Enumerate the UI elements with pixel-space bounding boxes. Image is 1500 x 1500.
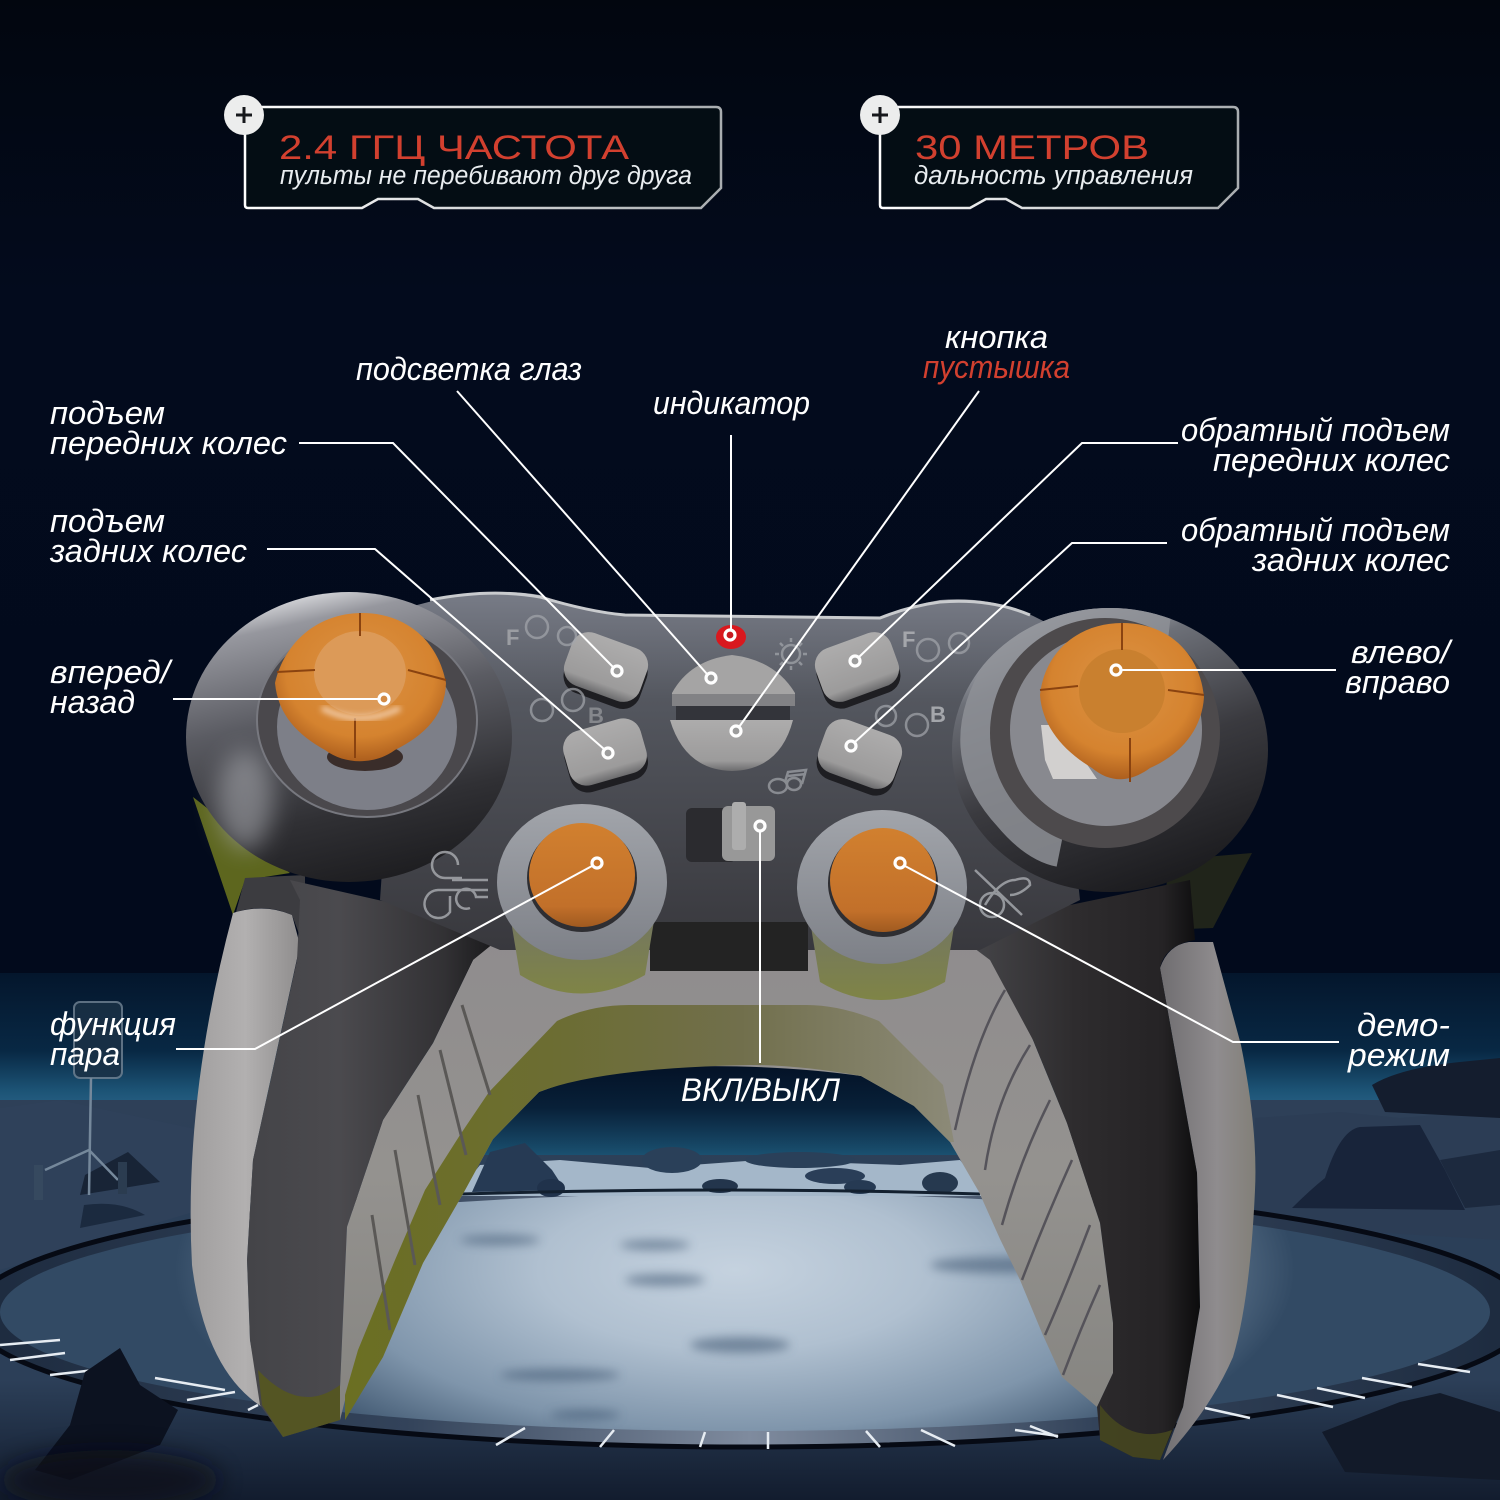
label: rear wheels reverse: обратный подъем — [1181, 512, 1450, 548]
label: power switch: ВКЛ/ВЫКЛ — [681, 1072, 840, 1108]
badge subtext: пульты не перебивают друг друга — [280, 162, 692, 190]
leader: eye light — [457, 391, 716, 683]
background sign on post — [34, 1002, 127, 1200]
label: front wheels up — [50, 395, 287, 461]
right stick housing — [952, 608, 1268, 892]
label: steam function: функция — [50, 1006, 176, 1042]
arch sky — [450, 1060, 1010, 1155]
right stick inner — [1010, 634, 1202, 826]
left grip olive tip — [258, 1370, 340, 1437]
ground shadow left — [0, 1450, 220, 1500]
label: front wheels reverse: передних колес — [1213, 442, 1450, 478]
leader: indicator — [725, 435, 735, 640]
button: rear up left — [559, 714, 652, 797]
label: rear wheels reverse: задних колес — [1251, 542, 1450, 578]
background: lunar landscape — [0, 973, 1500, 1500]
leader: steam function — [176, 858, 602, 1049]
floor rim line — [462, 1190, 980, 1194]
leader: front wheels reverse — [850, 443, 1178, 666]
icon: wind — [425, 852, 488, 918]
icon: F right: F — [902, 627, 915, 652]
centre button upper lip — [672, 694, 795, 706]
dark slot — [650, 922, 808, 971]
right stick ridge — [977, 620, 1170, 850]
leader: front wheels up — [299, 443, 622, 676]
leader: rear wheels reverse — [846, 543, 1167, 751]
label: pacifier button: пустышка — [923, 349, 1070, 385]
label: demo mode: режим — [1347, 1037, 1450, 1073]
rock front left — [35, 1348, 178, 1480]
label: steam function: пара — [50, 1036, 120, 1072]
label: demo mode — [1347, 1007, 1450, 1073]
icon: B left — [531, 689, 604, 728]
top plate — [380, 592, 1080, 950]
label: indicator: индикатор — [653, 385, 810, 421]
label: left right: вправо — [1345, 664, 1450, 700]
label: front wheels up: подъем — [50, 395, 165, 431]
label: front wheels reverse — [1181, 412, 1450, 478]
label: left right: влево/ — [1351, 634, 1453, 670]
label: forward back: назад — [50, 684, 135, 720]
red indicator — [716, 625, 746, 649]
centre button lower: pacifier — [670, 720, 793, 771]
label: front wheels up: передних колес — [50, 425, 287, 461]
left stick cap — [275, 613, 446, 761]
left shoulder dark — [236, 875, 305, 950]
big rock right — [1292, 1125, 1465, 1210]
leader: demo mode — [895, 858, 1339, 1042]
right stick well — [990, 618, 1220, 848]
right grip olive tip — [1100, 1405, 1172, 1460]
icon: B right: B — [930, 702, 946, 727]
ring markings — [0, 1340, 1470, 1449]
icon: B right — [876, 702, 946, 736]
label: rear wheels up: задних колес — [49, 533, 247, 569]
centre button groove — [676, 704, 790, 722]
game controller — [186, 592, 1268, 1460]
dark boulder at right horizon — [1372, 1058, 1500, 1118]
right stick cap — [1040, 623, 1204, 782]
icon: F left: F — [506, 625, 519, 650]
right dark grip — [950, 880, 1200, 1460]
label: eye light: подсветка глаз — [356, 351, 582, 387]
badge heading: 2.4 ГГЦ ЧАСТОТА — [279, 129, 629, 167]
horizon rocks under arch — [455, 1143, 990, 1197]
label: pacifier button — [923, 319, 1070, 385]
right olive edge — [1160, 853, 1252, 930]
label: demo mode: демо- — [1357, 1007, 1450, 1043]
badge subtext: дальность управления — [914, 162, 1193, 190]
badge frame — [880, 107, 1238, 208]
label: rear wheels reverse — [1181, 512, 1450, 578]
label: rear wheels up: подъем — [50, 503, 165, 539]
left stick base — [327, 743, 403, 771]
label: forward back: вперед/ — [50, 654, 173, 690]
left stick highlight — [217, 750, 273, 850]
left stick dome — [277, 644, 457, 810]
top plate highlight — [430, 593, 1030, 618]
ring platform — [0, 1181, 1500, 1447]
rock front right — [1322, 1393, 1500, 1480]
lower centre body — [340, 930, 1113, 1420]
button: front down right — [810, 627, 906, 714]
badge: 30 metres range — [860, 95, 1238, 208]
left stick well — [257, 623, 477, 817]
platform floor — [0, 1193, 1490, 1431]
icon: F left — [506, 616, 576, 650]
leader lines and markers — [173, 391, 1339, 1063]
icon: drift car — [975, 870, 1030, 917]
button: rear down right — [811, 714, 907, 801]
left orange button — [497, 804, 667, 994]
plus icon — [224, 95, 264, 135]
label: forward back — [50, 654, 173, 720]
right orange button — [797, 810, 967, 1000]
slider switch — [686, 802, 775, 862]
leader: left right — [1111, 665, 1336, 675]
label: left right — [1345, 634, 1453, 700]
arch olive band — [345, 1005, 954, 1420]
right grip light outer strip — [1160, 942, 1255, 1460]
button: front up left — [558, 627, 653, 714]
background: night sky — [0, 0, 1500, 975]
right limb stripes — [955, 990, 1100, 1375]
left olive edge — [193, 797, 290, 915]
icon: music — [769, 770, 806, 793]
left grip light outer strip — [191, 908, 300, 1407]
left dark grip — [247, 880, 510, 1437]
badge: 2.4 GHz frequency — [224, 95, 721, 208]
label: steam function — [50, 1006, 176, 1072]
right stick slot — [1041, 725, 1097, 779]
icon: sun — [775, 638, 807, 670]
label: pacifier button: кнопка — [945, 319, 1048, 355]
leader: rear wheels up — [267, 549, 613, 758]
label: rear wheels up — [49, 503, 247, 569]
label: front wheels reverse: обратный подъем — [1181, 412, 1450, 448]
badge frame — [245, 107, 721, 208]
leader: power switch — [755, 821, 765, 1063]
icon: B left: B — [588, 703, 604, 728]
plus icon — [860, 95, 900, 135]
left limb stripes — [372, 1005, 490, 1330]
left stick housing — [186, 592, 512, 882]
centre button upper: eye light — [672, 655, 795, 706]
leader: pacifier button — [731, 391, 979, 736]
icon: F right — [902, 627, 969, 661]
badge heading: 30 МЕТРОВ — [915, 129, 1149, 167]
leader: forward back — [173, 694, 389, 704]
floor dark patches — [460, 1235, 1070, 1420]
